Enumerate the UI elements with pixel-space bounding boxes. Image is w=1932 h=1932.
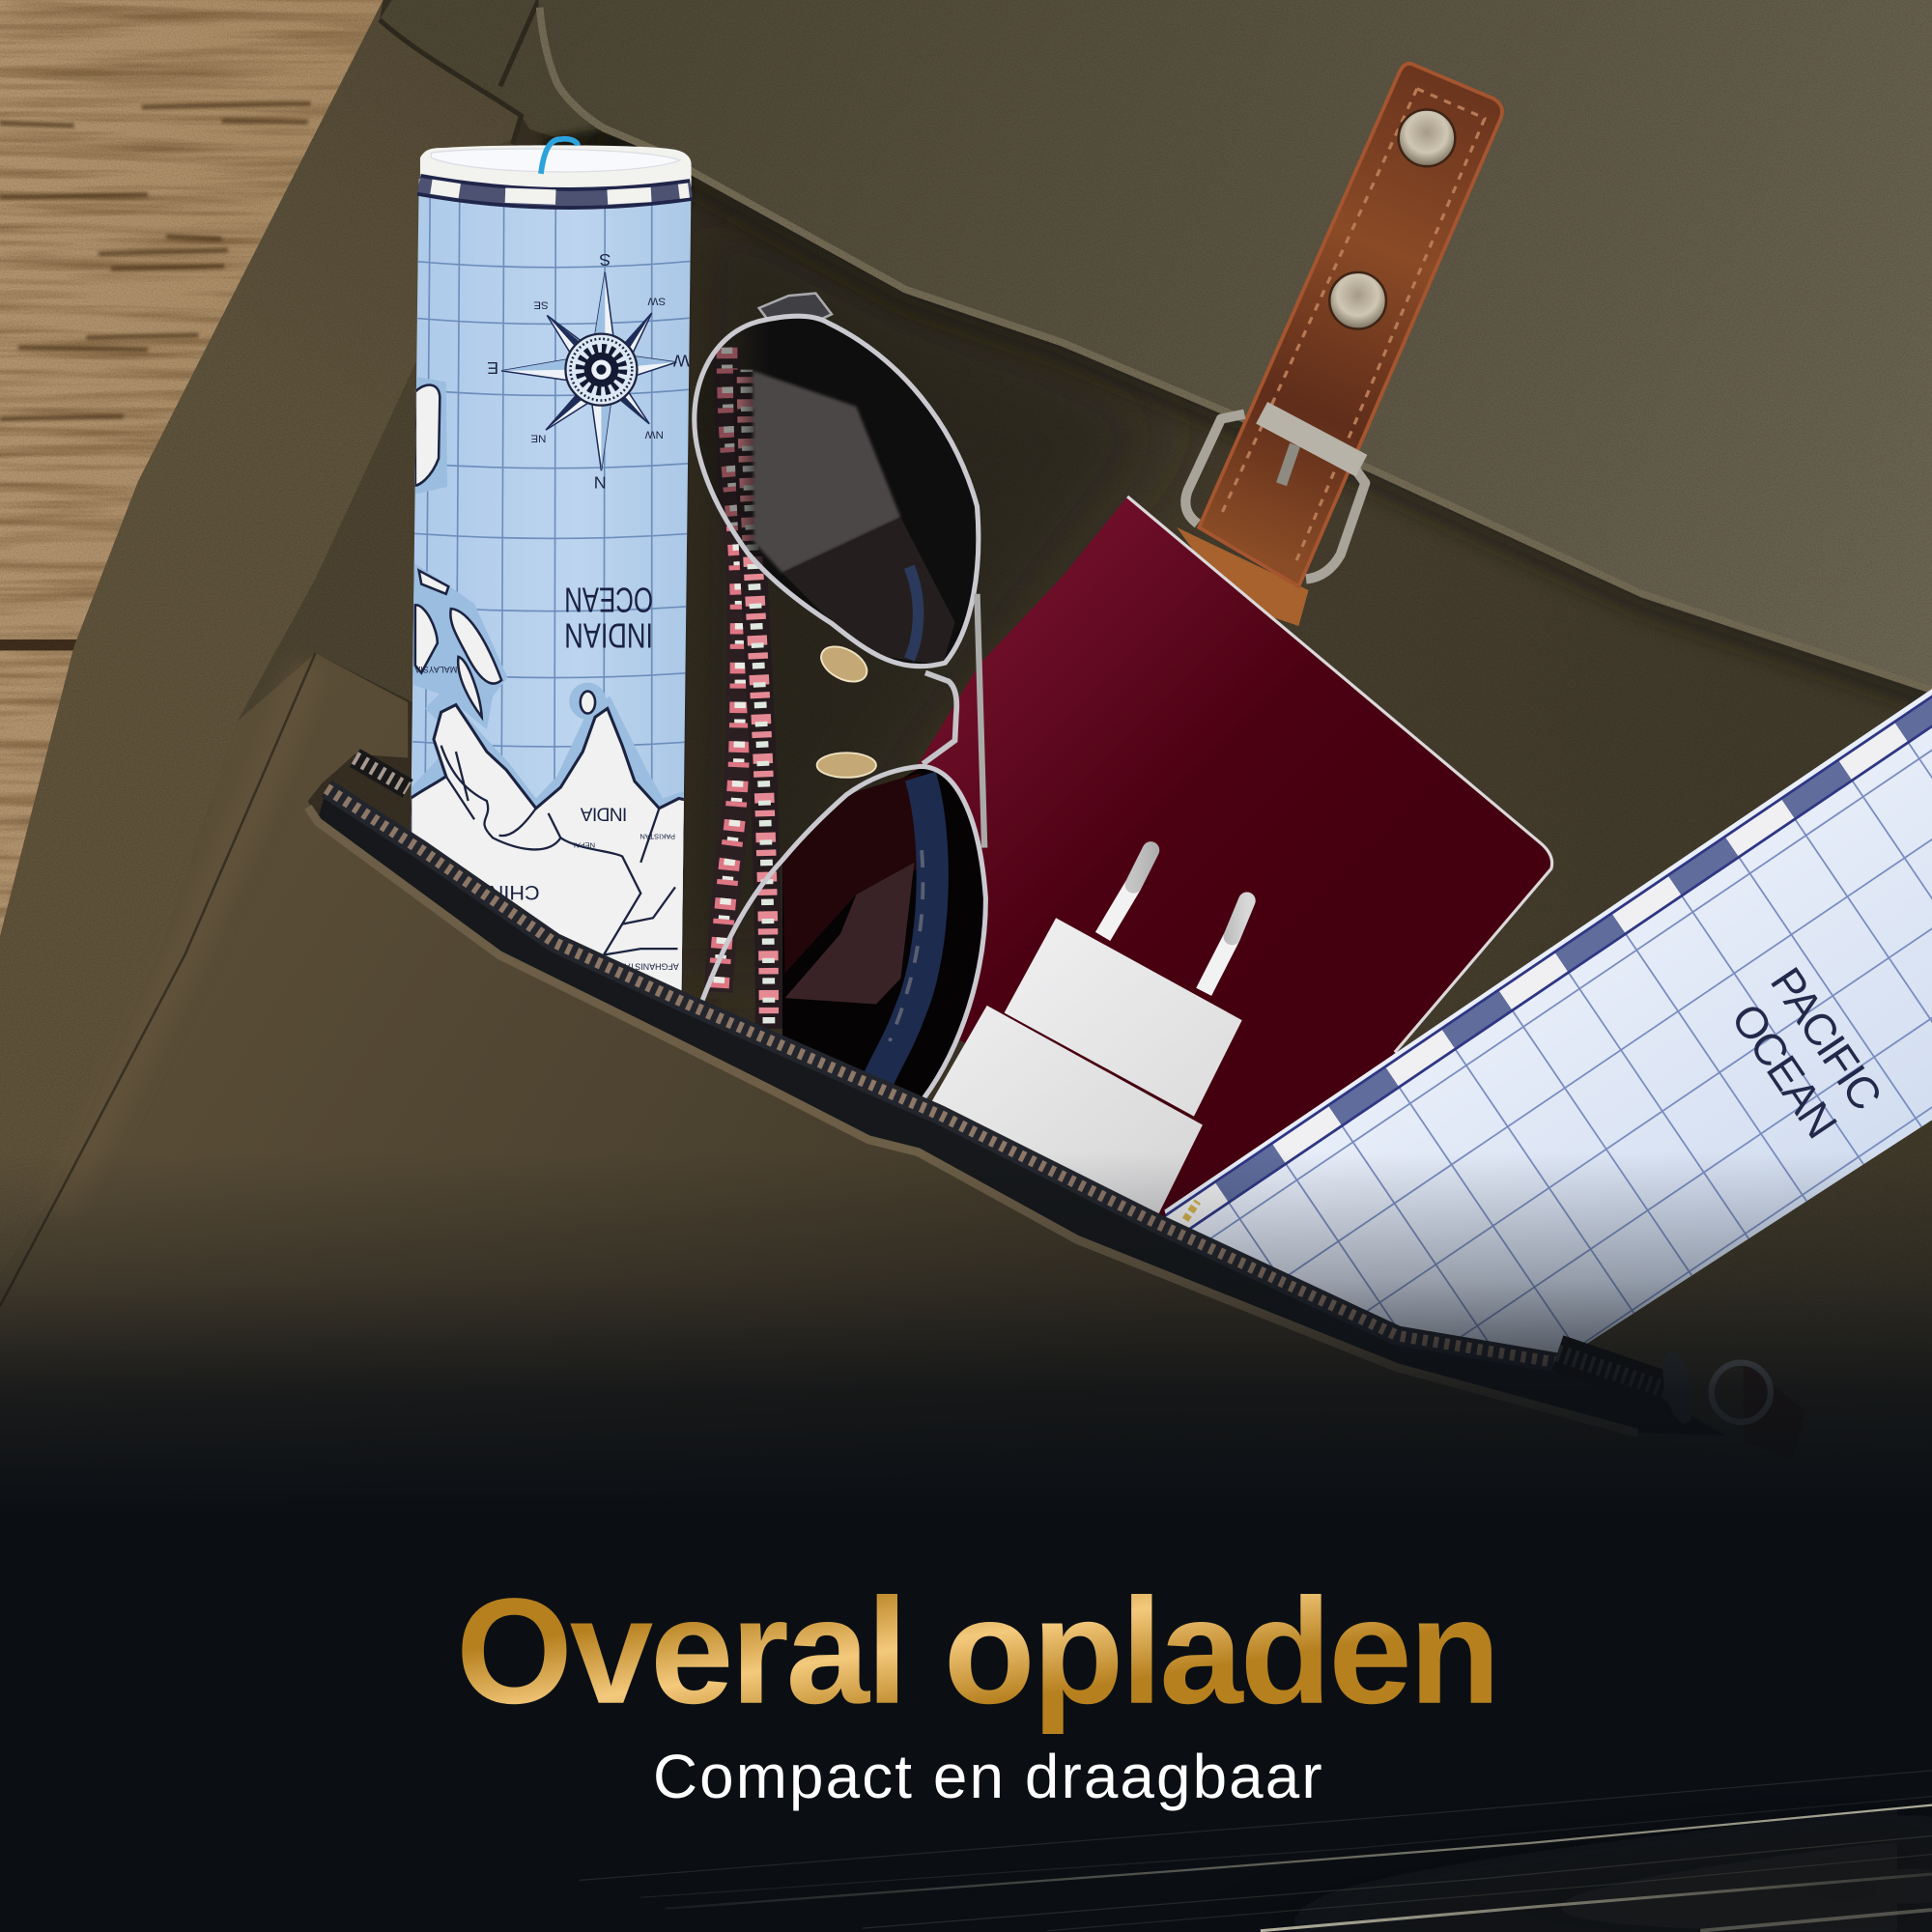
leather strap: [1177, 64, 1502, 626]
map grid: [412, 197, 692, 801]
yellow zip detail: [1185, 1202, 1198, 1220]
map paper: [411, 179, 692, 1005]
compass rose: [501, 272, 676, 470]
ocean label on second roll: PACIFIC: [1761, 958, 1892, 1120]
title: Overal opladen: [456, 1567, 1501, 1735]
ocean label on second roll: OCEAN: [1721, 994, 1848, 1147]
map border band: [419, 185, 692, 198]
buckle pin: [1282, 444, 1295, 484]
shoulder seam: [380, 0, 538, 144]
upper shoulder panel: [380, 0, 604, 146]
bridge: [923, 672, 956, 764]
light streaks: [579, 1771, 1932, 1931]
buckle bar: [1262, 412, 1361, 466]
strap tail: [1177, 527, 1309, 626]
country labels: CHINA: [474, 881, 540, 905]
lower lens: [782, 769, 983, 1096]
light haze: [1171, 1836, 1932, 1932]
compass letters: NE: [530, 432, 546, 443]
rivets: [1329, 110, 1455, 329]
country labels: INDIA: [581, 804, 627, 824]
sunglasses: [684, 294, 998, 1109]
shadow behind roll top: [542, 128, 690, 210]
country labels: MALAYSIA: [414, 665, 457, 674]
paper top rim: [420, 145, 692, 196]
hinge bracket: [759, 294, 832, 323]
wall charger: [930, 850, 1247, 1222]
islands: [415, 385, 501, 717]
strap body: [1199, 64, 1502, 586]
dark wood streaks: [0, 103, 310, 419]
backpack back panel fold: [238, 138, 516, 721]
paper inner opening: [431, 149, 680, 172]
country labels: AFGHANISTAN: [618, 961, 679, 971]
compass letters: W: [673, 351, 690, 370]
fabric texture: [0, 0, 1932, 1355]
zipper end tape: [1557, 1353, 1665, 1390]
nose pads: [815, 639, 876, 778]
pocket highlights: [0, 653, 1637, 1433]
small island: [581, 692, 595, 714]
second map roll: [1165, 689, 1932, 1352]
compass letters: SE: [533, 298, 549, 310]
shadow inside pocket: [684, 185, 1182, 974]
bottom dark fade: [0, 1152, 1932, 1516]
passport page edge: [1127, 497, 1552, 1052]
flap shadow: [604, 135, 1932, 699]
lower lens frame: [702, 766, 985, 1097]
upper body: [1005, 918, 1242, 1117]
country borders: [441, 746, 678, 955]
neck chain: [719, 348, 769, 1029]
passport: [788, 497, 1552, 1233]
compass letters: N: [594, 473, 607, 493]
temple arm: [977, 594, 984, 848]
upper lens: [697, 319, 976, 664]
main land mass: [411, 705, 692, 1005]
compass letters: E: [487, 358, 498, 378]
compass letters: NW: [645, 428, 664, 440]
country labels: [414, 665, 679, 971]
zipper tape: [318, 788, 1725, 1435]
pin metal tips: [1133, 850, 1247, 936]
wooden table background: [0, 0, 384, 936]
compass letters: S: [599, 250, 611, 270]
strap stitching: [1220, 89, 1485, 567]
world map roll: [411, 139, 692, 1005]
upper lens frame: [695, 316, 979, 667]
dark footer: [0, 1515, 1932, 1932]
coast halo: [411, 376, 692, 1005]
compass letters: [487, 250, 690, 493]
ocean label: INDIAN: [564, 615, 653, 654]
roll border band: [1166, 725, 1908, 1217]
lower body: [930, 1006, 1203, 1222]
ocean label: [564, 580, 653, 654]
backpack side panel: [0, 0, 522, 1275]
backpack top flap: [538, 0, 1932, 690]
plug pins: [1103, 885, 1233, 992]
ocean label: OCEAN: [564, 580, 653, 618]
flap edge rope: [540, 8, 1932, 690]
roll grid: [1210, 742, 1932, 1343]
blue hook: [541, 139, 578, 174]
compass letters: SW: [647, 296, 666, 307]
country labels: NEPAL: [572, 840, 595, 849]
ocean label on second roll: [1721, 958, 1892, 1147]
country labels: PAKISTAN: [639, 833, 675, 841]
buckle: [1185, 414, 1365, 579]
zipper teeth: [327, 757, 1665, 1390]
subtitle: Compact en draagbaar: [653, 1742, 1322, 1811]
front zip pocket: [0, 653, 1932, 1932]
zipper pull: [1658, 1349, 1805, 1460]
